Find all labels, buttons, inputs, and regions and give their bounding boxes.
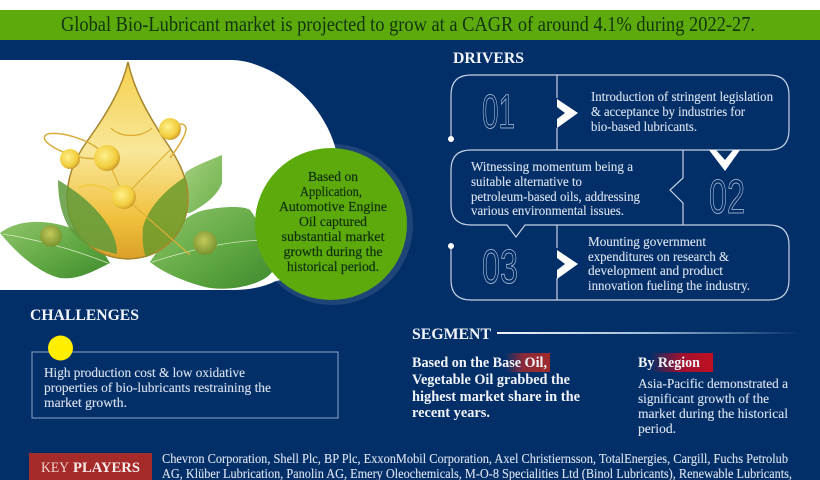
panel: drivers flow frame xyxy=(448,75,789,300)
key players list xyxy=(162,452,792,480)
panel: challenges box xyxy=(32,336,338,418)
driver 02: suitable alternative to xyxy=(471,175,582,190)
key players label xyxy=(29,453,152,480)
segment: base oil: Vegetable Oil grabbed the xyxy=(412,372,570,388)
key players label: KEY xyxy=(41,460,69,476)
driver 02: 02 xyxy=(709,171,745,224)
callout ring behind panel xyxy=(252,144,413,305)
segment: by region: market during the historical xyxy=(638,407,788,422)
icon: chevron arrow 3 xyxy=(557,250,578,279)
segment: base oil: recent years. xyxy=(412,405,490,421)
callout: application circle: growth during the xyxy=(284,245,382,260)
segment: by region: Asia-Pacific demonstrated a xyxy=(638,377,789,392)
segment: base oil: highest market share in the xyxy=(412,389,580,405)
top white strip xyxy=(0,0,820,10)
callout: application circle: substantial market xyxy=(282,230,385,245)
icon: oil drop with leaves xyxy=(0,62,272,289)
heading: challenges: CHALLENGES xyxy=(30,307,139,324)
driver 01: bio-based lubricants. xyxy=(591,120,697,135)
callout: application circle: Based on xyxy=(308,170,358,185)
driver 03: expenditures on research & xyxy=(588,250,729,265)
segment: base oil: Based on the Base Oil, xyxy=(412,355,547,371)
segment: base oil xyxy=(412,353,580,421)
driver 03: Mounting government xyxy=(588,235,706,250)
panel: challenges box: properties of bio-lubricants restraining the xyxy=(44,381,271,396)
driver 03: 03 xyxy=(482,241,518,294)
panel: challenges box: market growth. xyxy=(44,396,127,411)
driver 02: Witnessing momentum being a xyxy=(471,160,634,175)
key players label: PLAYERS xyxy=(73,460,140,476)
driver 02: petroleum-based oils, addressing xyxy=(471,190,640,205)
callout: application circle: historical period. xyxy=(287,260,379,275)
heading: drivers: DRIVERS xyxy=(453,50,524,67)
segment: by region: significant growth of the xyxy=(638,392,769,407)
panel: challenges box: High production cost & low oxidative xyxy=(44,366,245,381)
driver 03: development and product xyxy=(588,264,723,279)
callout: application circle: Oil captured xyxy=(299,215,367,230)
icon: chevron arrow 1 xyxy=(557,99,578,128)
icon: chevron arrow 2 xyxy=(709,150,740,171)
driver 01: Introduction of stringent legislation xyxy=(591,90,773,105)
segment: by region: period. xyxy=(638,422,676,437)
panel: white image panel xyxy=(0,60,336,290)
heading: segment: SEGMENT xyxy=(412,326,491,343)
callout: application circle: Automotive Engine xyxy=(279,200,387,215)
driver 01: 01 xyxy=(482,86,515,139)
driver 01: & acceptance by industries for xyxy=(591,105,745,120)
callout: application circle xyxy=(255,148,407,300)
driver 03: innovation fueling the industry. xyxy=(588,279,750,294)
driver 02 xyxy=(471,160,745,224)
driver 01 xyxy=(482,86,773,139)
driver 02: various environmental issues. xyxy=(471,204,624,219)
driver 03 xyxy=(482,235,750,294)
callout: application circle: Application, xyxy=(300,185,362,200)
segment: by region: By Region xyxy=(638,355,701,371)
segment: by region xyxy=(638,353,789,437)
